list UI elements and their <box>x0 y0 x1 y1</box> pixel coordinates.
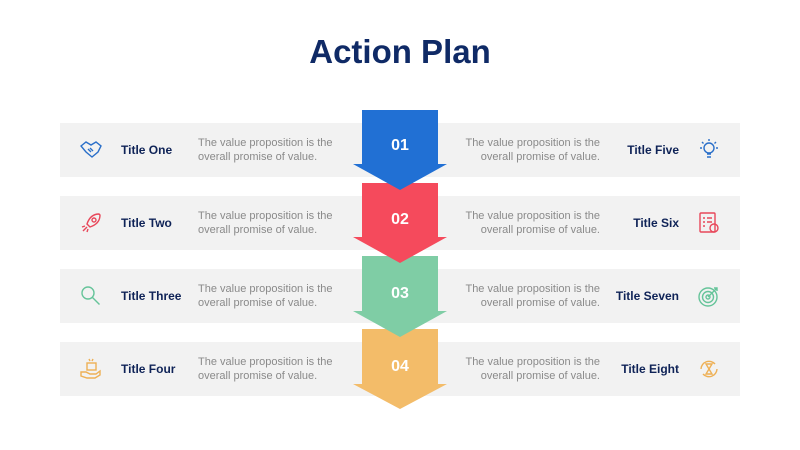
title two: Title Two <box>121 216 172 230</box>
icon: hourglass cycle <box>700 360 718 378</box>
desc: The value proposition is the overall promise of value. <box>198 356 333 382</box>
icon: hand box <box>80 358 101 379</box>
arrow 02: 02 <box>391 211 409 228</box>
row 4 <box>60 342 740 396</box>
title three: Title Three <box>121 289 181 303</box>
icon: target <box>698 287 718 307</box>
title six: Title Six <box>633 216 679 230</box>
icon: rocket <box>82 213 101 232</box>
icon: handshake <box>80 141 102 158</box>
icon: bulb <box>700 139 718 158</box>
desc right: The value proposition is the overall promise of value. <box>465 137 600 162</box>
arrow 04: 04 <box>391 358 409 375</box>
desc: The value proposition is the overall promise of value. <box>198 283 333 308</box>
title: Action Plan <box>309 33 491 70</box>
row 3 <box>60 269 740 323</box>
title eight: Title Eight <box>621 362 679 376</box>
title one: Title One <box>121 143 172 157</box>
arrow 03 <box>353 256 447 337</box>
arrow 01: 01 <box>391 137 409 154</box>
desc right: The value proposition is the overall promise of value. <box>465 283 600 308</box>
arrow 04 <box>353 329 447 409</box>
row 2 <box>60 196 740 250</box>
desc: The value proposition is the overall promise of value. <box>198 137 333 162</box>
row 1 <box>60 123 740 177</box>
desc: The value proposition is the overall promise of value. <box>198 210 333 236</box>
icon: magnifier <box>81 286 100 305</box>
arrow 02 <box>353 183 447 263</box>
arrow 01 <box>353 110 447 190</box>
arrow 03: 03 <box>391 285 409 302</box>
desc right: The value proposition is the overall promise of value. <box>465 356 600 382</box>
desc right: The value proposition is the overall promise of value. <box>465 210 600 236</box>
title four: Title Four <box>121 362 175 376</box>
title five: Title Five <box>627 143 679 157</box>
title seven: Title Seven <box>616 289 679 303</box>
icon: checklist <box>699 212 719 233</box>
